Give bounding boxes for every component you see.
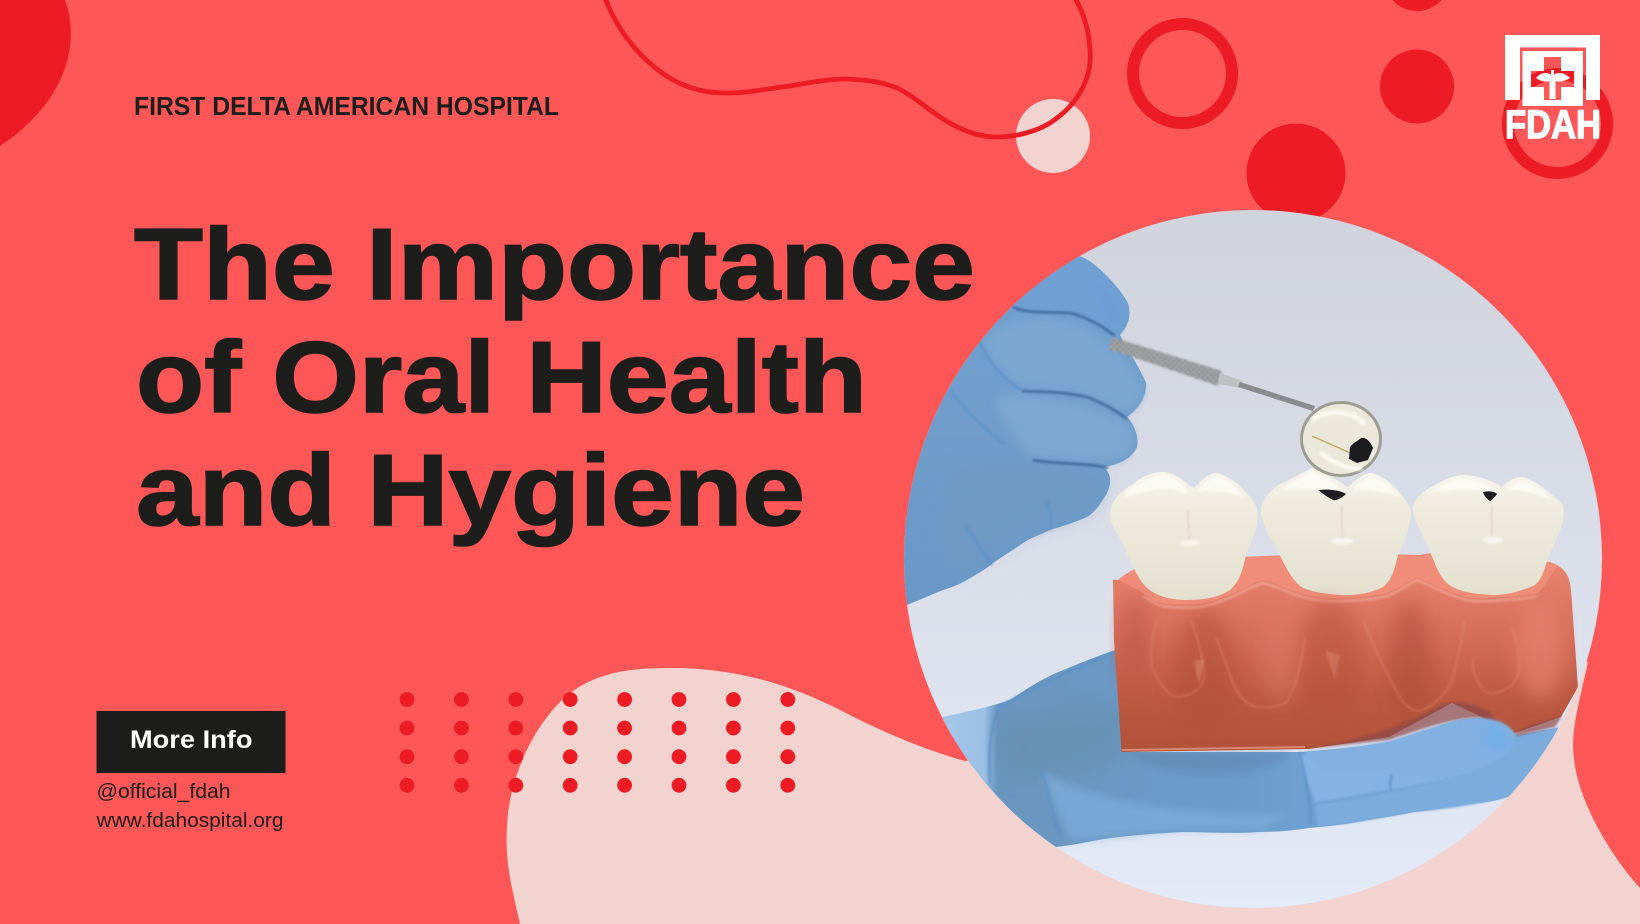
- title: and Hygiene: [136, 435, 805, 547]
- ring behind logo: [1508, 74, 1607, 173]
- caduceus: [1536, 70, 1570, 99]
- thumb over gum: [1305, 718, 1514, 778]
- decorative ring: [1133, 24, 1232, 123]
- title: of Oral Health: [136, 322, 867, 434]
- wavy line: [605, 0, 1090, 137]
- top partial circle: [1384, 0, 1450, 11]
- title: The Importance: [134, 209, 975, 321]
- logo: FDAH: [1505, 35, 1601, 147]
- teeth: [1110, 468, 1564, 600]
- bottom pale blob: [507, 662, 1640, 924]
- tooth middle: [1261, 468, 1411, 595]
- website: www.fdahospital.org: [95, 810, 284, 832]
- hospital name: FIRST DELTA AMERICAN HOSPITAL: [134, 93, 559, 121]
- lower glove palm: [942, 650, 1559, 847]
- red circle right: [1380, 50, 1454, 124]
- red circle large: [1246, 124, 1346, 222]
- photo: dental model in gloved hands: [890, 205, 1610, 915]
- pale circle: [1016, 99, 1090, 173]
- dot grid: [400, 692, 795, 793]
- logo square with cross: [1522, 51, 1583, 106]
- social handle: @official_fdah: [96, 781, 230, 803]
- top-left corner blob: [0, 0, 71, 146]
- logo frame: [1505, 35, 1600, 100]
- more info button: More Info: [130, 726, 252, 754]
- title: [134, 209, 975, 547]
- cavity middle tooth: [1319, 490, 1346, 500]
- gum model: back ridge: [1113, 553, 1562, 605]
- upper glove holding tool: [904, 256, 1148, 605]
- more info button: [96, 711, 286, 773]
- logo wordmark: FDAH: [1505, 103, 1601, 147]
- tooth right: [1413, 475, 1564, 595]
- tooth left: [1110, 472, 1258, 600]
- dental mirror tool: [1109, 337, 1382, 477]
- gum model: front: [1113, 566, 1578, 752]
- cavity right tooth: [1483, 491, 1497, 501]
